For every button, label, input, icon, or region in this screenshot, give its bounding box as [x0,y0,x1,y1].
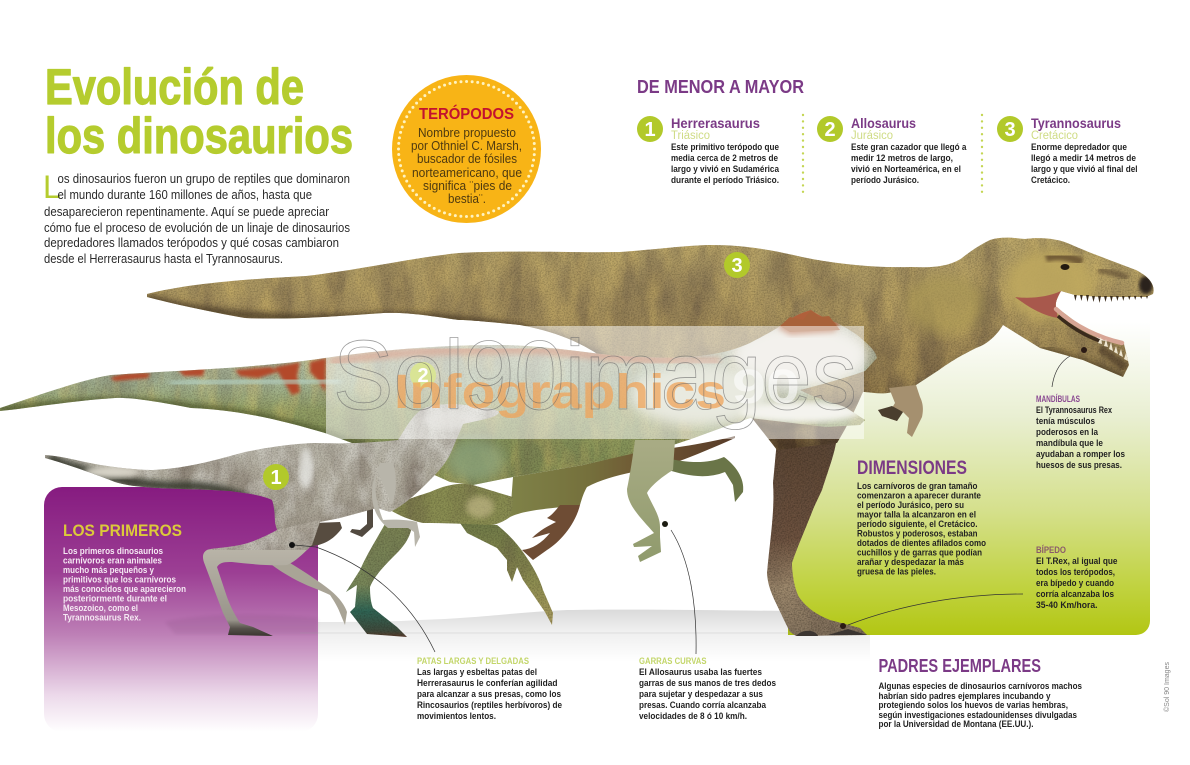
callout: patas largas y delgadas [417,656,562,722]
callout: bípedo: todos los terópodos, [1036,567,1115,578]
description: Este gran cazador que llegó a [851,142,967,153]
number badge 1 [637,116,663,142]
badge text: norteamericano, que [412,166,522,180]
illustration: Allosaurus [0,305,880,640]
number marker 2 on Allosaurus: 2 [417,365,429,387]
panel text: dimensiones [857,458,986,578]
panel text: los primeros: más conocidos que aparecieron [63,584,186,594]
callout: bípedo: El T.Rex, al igual que [1036,556,1118,567]
watermark: Sol90images outline: Sol90images [333,320,857,430]
number badge 3: 3 [1004,119,1016,141]
panel text: dimensiones: cuchillos y de garras que podían [857,548,982,558]
body of Herrerasaurus [45,404,499,545]
panel: dimensiones green background [788,322,1150,635]
callout: garras curvas [639,656,776,722]
panel text: los primeros: primitivos que los carnívoros [63,574,176,584]
text block: padres ejemplares [878,655,1082,730]
far foot of Allosaurus [522,505,580,560]
panel text: los primeros: Mesozoico, como el [63,603,138,613]
rear leg of Allosaurus [346,522,412,637]
callout: garras curvas: GARRAS CURVAS [639,656,706,667]
column 3: Tyrannosaurus [997,115,1138,186]
callout: mandíbulas: MANDÍBULAS [1036,394,1080,405]
number marker 1 on Herrerasaurus [263,464,289,490]
number marker 1 on Herrerasaurus: 1 [270,467,282,489]
callout: patas largas y delgadas: para alcanzar a sus presas, como los [417,689,561,700]
callout: terópodos badge [392,75,541,223]
panel text: dimensiones: gruesa de las pieles. [857,566,936,578]
callout: bípedo: BÍPEDO [1036,545,1066,556]
lower teeth of Tyrannosaurus [1098,337,1128,361]
column 1: Herrerasaurus [637,115,780,186]
callout: mandíbulas: ayudaban a romper los [1036,449,1125,460]
period: Triásico [671,130,710,142]
number badge 1: 1 [644,119,656,141]
badge heading: TERÓPODOS [419,104,514,123]
callout: mandíbulas: huesos de sus presas. [1036,460,1122,471]
callout: patas largas y delgadas: Herrerasaurus le conferían agilidad [417,678,558,689]
number badge 3 [997,116,1023,142]
panel text: dimensiones: Los carnívoros de gran tamaño [857,481,978,492]
leg textures of Allosaurus [340,480,560,640]
body of Tyrannosaurus [147,238,1154,450]
callout: patas largas y delgadas: Rincosaurios (reptiles herbívoros) de [417,700,562,711]
intro paragraph: os dinosaurios fueron un grupo de reptiles que dominaron [58,171,350,186]
description: período Jurásico. [851,175,919,186]
column 2: Allosaurus [817,115,967,186]
leader line: patas largas y delgadas [289,542,435,652]
leader line: bípedo [840,594,1023,629]
forelimb of Allosaurus [665,457,743,502]
panel text: los primeros: Tyrannosaurus Rex. [63,612,141,622]
title: Evolución de [45,59,304,115]
number badge 2: 2 [824,119,836,141]
leader line: garras curvas [662,521,696,654]
skin texture and shading of Tyrannosaurus [140,235,1160,455]
callout: garras curvas: velocidades de 8 ó 10 km/h. [639,711,747,722]
description [671,142,780,186]
callout: garras curvas: garras de sus manos de tres dedos [639,678,776,689]
callout: patas largas y delgadas: movimientos lentos. [417,711,496,722]
intro paragraph: desaparecieron repentinamente. Aquí se puede apreciar [44,204,330,219]
skin markings of Allosaurus [0,310,877,485]
claws of Tyrannosaurus hand [878,406,903,421]
species name: Herrerasaurus [671,115,760,131]
hind leg of Herrerasaurus [203,520,320,636]
title: los dinosaurios [45,108,353,164]
heading: de menor a mayor: DE MENOR A MAYOR [637,77,804,97]
panel text: los primeros: carnívoros eran animales [63,556,162,566]
title [45,59,353,164]
badge text: por Othniel C. Marsh, [411,139,522,153]
upper teeth of Tyrannosaurus [1074,295,1148,303]
callout: mandíbulas [1036,394,1125,471]
leader line: mandíbulas [1052,347,1087,387]
raised leg and claws of Allosaurus [627,440,675,562]
arm of Tyrannosaurus [878,385,923,437]
ground shadow [165,610,870,662]
description [851,142,967,186]
description: vivió en Norteamérica, en el [851,164,961,175]
description: largo y que vivió al final del [1031,164,1138,175]
panel text: dimensiones: arañar y despedazar la más [857,557,964,568]
watermark panel [326,320,864,439]
panel text: los primeros: LOS PRIMEROS [63,521,182,540]
intro paragraph [43,169,350,266]
watermark: white numerals: 90 [732,361,800,414]
callout: mandíbulas: tenía músculos [1036,416,1095,427]
far thigh of Herrerasaurus [300,522,342,548]
body of Allosaurus [0,310,877,485]
badge text: Nombre propuesto [418,126,516,140]
number badge 2 [817,116,843,142]
illustration: Tyrannosaurus [140,235,1160,636]
near leg of Tyrannosaurus [767,443,867,636]
forward leg of Herrerasaurus [272,563,347,625]
number marker 3 on Tyrannosaurus: 3 [731,255,743,277]
callout: bípedo: era bípedo y cuando [1036,578,1114,589]
period: Cretácico [1031,130,1078,142]
description [1031,142,1138,186]
panel text: dimensiones: período siguiente, el Cretácico. [857,519,978,530]
callout: garras curvas: para sujetar y despedazar a sus [639,689,763,700]
illustration: Herrerasaurus [40,400,505,636]
badge text [411,126,522,206]
description: media cerca de 2 metros de [671,153,778,164]
badge text: significa ¨pies de [423,179,512,193]
arm of Herrerasaurus [372,463,420,547]
panel text: dimensiones: dotados de dientes afilados como [857,538,986,549]
intro paragraph: el mundo durante 160 millones de años, hasta que [58,187,312,202]
callout: mandíbulas: poderosos en la [1036,427,1099,438]
far thigh of Allosaurus [510,436,735,517]
period: Jurásico [851,130,893,142]
callout: patas largas y delgadas: PATAS LARGAS Y DELGADAS [417,656,529,667]
description: llegó a medir 14 metros de [1031,153,1136,164]
badge text: bestia¨. [448,192,486,206]
crest of Allosaurus [780,310,840,332]
watermark: Infographics: Infographics [394,366,726,419]
far arm of Herrerasaurus [350,508,373,537]
description: medir 12 metros de largo, [851,153,953,164]
description: largo y vivió en Sudamérica [671,164,780,175]
callout: bípedo [1036,545,1118,611]
text block: padres ejemplares: por la Universidad de Montana (EE.UU.). [878,719,1034,730]
panel text: dimensiones: DIMENSIONES [857,458,967,479]
intro paragraph: cómo fue el proceso de evolución de un linaje de dinosaurios [44,220,350,235]
near thigh of Allosaurus [390,484,513,525]
panel: los primeros background [44,487,318,732]
panel text: los primeros [63,521,186,622]
number marker 2 on Allosaurus [410,362,436,388]
intro paragraph: desde el Herrerasaurus hasta el Tyrannosaurus. [44,251,283,266]
text block: padres ejemplares: según investigaciones estadounidenses divulgadas [878,710,1077,721]
species name: Tyrannosaurus [1031,115,1121,131]
front leg of Allosaurus [460,523,553,625]
toes of Tyrannosaurus [796,629,867,636]
text block: padres ejemplares: habrían sido padres ejemplares incubando y [878,691,1051,702]
description: durante el período Triásico. [671,175,779,186]
species name: Allosaurus [851,115,916,131]
panel text: los primeros: mucho más pequeños y [63,565,155,575]
callout: patas largas y delgadas: Las largas y esbeltas patas del [417,667,537,678]
callout: bípedo: 35-40 Km/hora. [1036,600,1098,611]
text block: padres ejemplares: protegiendo solos los huevos de varias hembras, [878,700,1068,711]
text block: padres ejemplares: PADRES EJEMPLARES [878,655,1041,676]
drop cap: L [43,169,61,205]
panel text: dimensiones: Robustos y poderosos, estaban [857,528,978,540]
intro paragraph: depredadores llamados terópodos y qué cosas cambiaron [44,235,339,250]
skin markings of Herrerasaurus [40,400,505,550]
callout: mandíbulas: El Tyrannosaurus Rex [1036,405,1113,416]
tongue of Tyrannosaurus [1056,309,1122,343]
description: Este primitivo terópodo que [671,142,779,153]
panel text: los primeros: posteriormente durante el [63,594,167,604]
panel text: dimensiones: comenzaron a aparecer durante [857,490,981,502]
panel text: dimensiones: mayor talla la alcanzaron en el [857,510,976,520]
mouth interior of Tyrannosaurus [1015,291,1061,318]
description: Cretácico. [1031,175,1070,186]
callout: garras curvas: El Allosaurus usaba las fuertes [639,667,762,678]
callout: mandíbulas: mandíbula que le [1036,438,1103,449]
description: Enorme depredador que [1031,142,1127,153]
eye of Tyrannosaurus [1060,264,1070,270]
panel text: dimensiones: el período Jurásico, pero su [857,500,964,511]
callout: garras curvas: presas. Cuando corría alcanzaba [639,700,767,711]
panel text: los primeros: Los primeros dinosaurios [63,546,163,556]
lower jaw inner edge of Tyrannosaurus [1058,316,1100,341]
text block: padres ejemplares: Algunas especies de dinosaurios carnívoros machos [878,681,1082,692]
badge text: buscador de fósiles [417,152,517,166]
credit: ©Sol 90 Images [1162,662,1171,712]
callout: bípedo: corría alcanzaba los [1036,589,1114,600]
number marker 3 on Tyrannosaurus [724,252,750,278]
